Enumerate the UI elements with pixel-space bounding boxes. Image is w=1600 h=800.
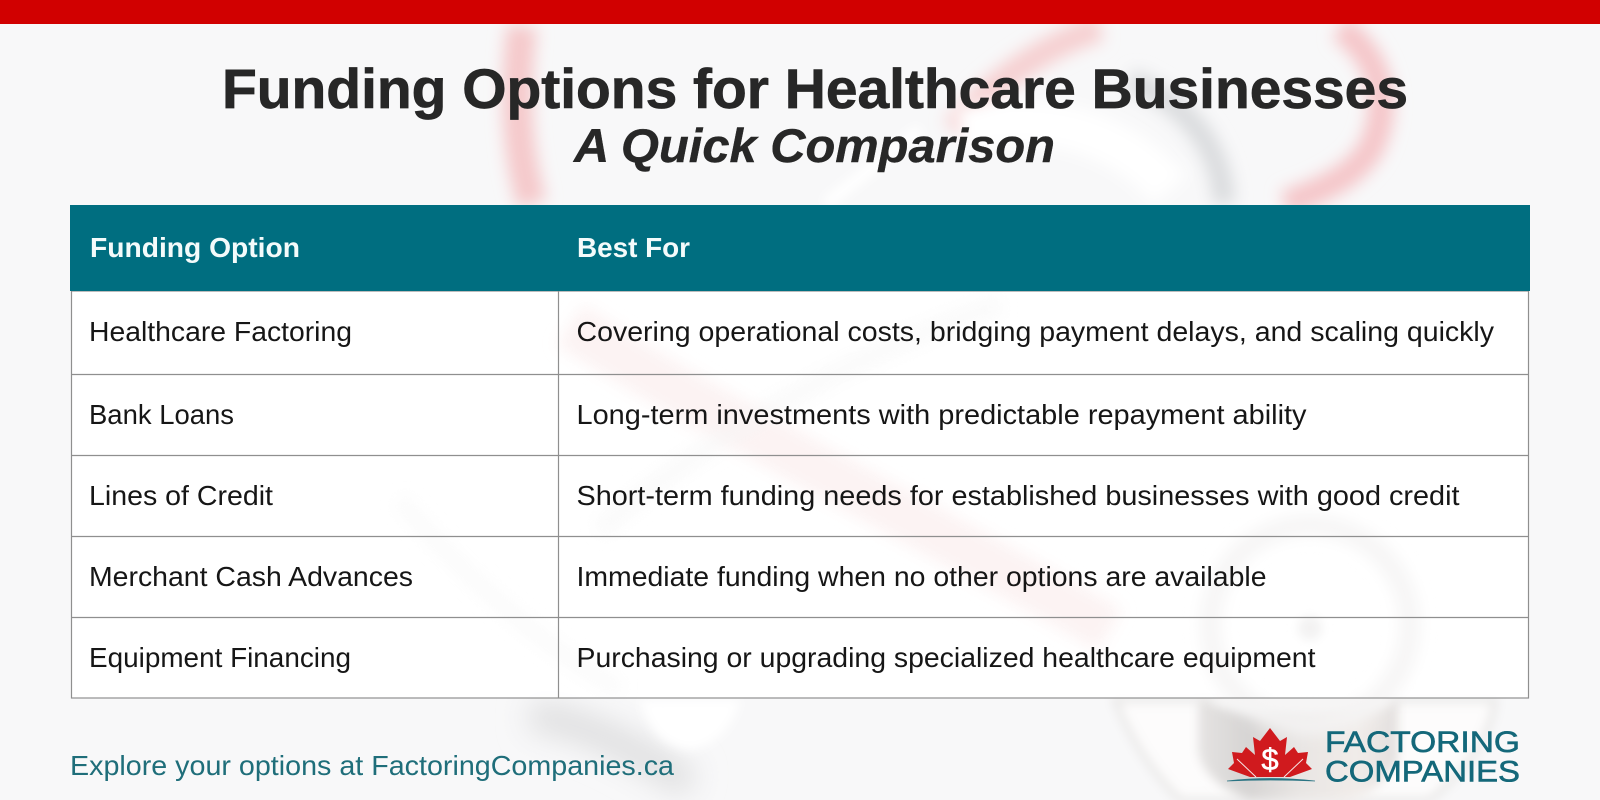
- title: Funding Options for Healthcare Businesses: [222, 57, 1408, 120]
- table grid lines: [71, 291, 1529, 698]
- row: Lines of Credit: Lines of Credit: [89, 480, 273, 511]
- table header row: Best For: [577, 232, 690, 263]
- row: Merchant Cash Advances: Merchant Cash Advances: [89, 561, 413, 592]
- row: Bank Loans: [89, 399, 1307, 430]
- footer call to action: Explore your options at FactoringCompanies.ca: [70, 750, 675, 781]
- row: Bank Loans: Bank Loans: [89, 399, 234, 430]
- table header row: [70, 205, 1530, 291]
- row: Lines of Credit: Short-term funding needs for established businesses with good credit: [576, 480, 1460, 511]
- row: Healthcare Factoring: Covering operational costs, bridging payment delays, and scaling quickly: [576, 316, 1494, 347]
- icon: red maple leaf with dollar sign: $: [1261, 742, 1279, 777]
- logo wordmark: COMPANIES: [1325, 756, 1520, 788]
- table body panel: [71, 291, 1529, 725]
- logo wordmark: [1325, 726, 1520, 788]
- row: Lines of Credit: [89, 480, 1460, 511]
- row: Merchant Cash Advances: Immediate funding when no other options are available: [576, 561, 1266, 592]
- row: Equipment Financing: [89, 642, 1316, 673]
- icon: red maple leaf with dollar sign: [1227, 728, 1315, 781]
- logo: Factoring Companies: [1227, 726, 1520, 788]
- table header row: Funding Option: [90, 232, 300, 263]
- row: Equipment Financing: Equipment Financing: [89, 642, 351, 673]
- logo wordmark: FACTORING: [1325, 726, 1520, 759]
- top red bar: [0, 0, 1600, 24]
- subtitle: A Quick Comparison: [573, 119, 1055, 172]
- row: Equipment Financing: Purchasing or upgrading specialized healthcare equipment: [576, 642, 1316, 673]
- comparison table: [70, 205, 1530, 725]
- row: Bank Loans: Long-term investments with predictable repayment ability: [576, 399, 1307, 430]
- row: Healthcare Factoring: Healthcare Factoring: [89, 316, 352, 347]
- row: Healthcare Factoring: [89, 316, 1494, 347]
- row: Merchant Cash Advances: [89, 561, 1266, 592]
